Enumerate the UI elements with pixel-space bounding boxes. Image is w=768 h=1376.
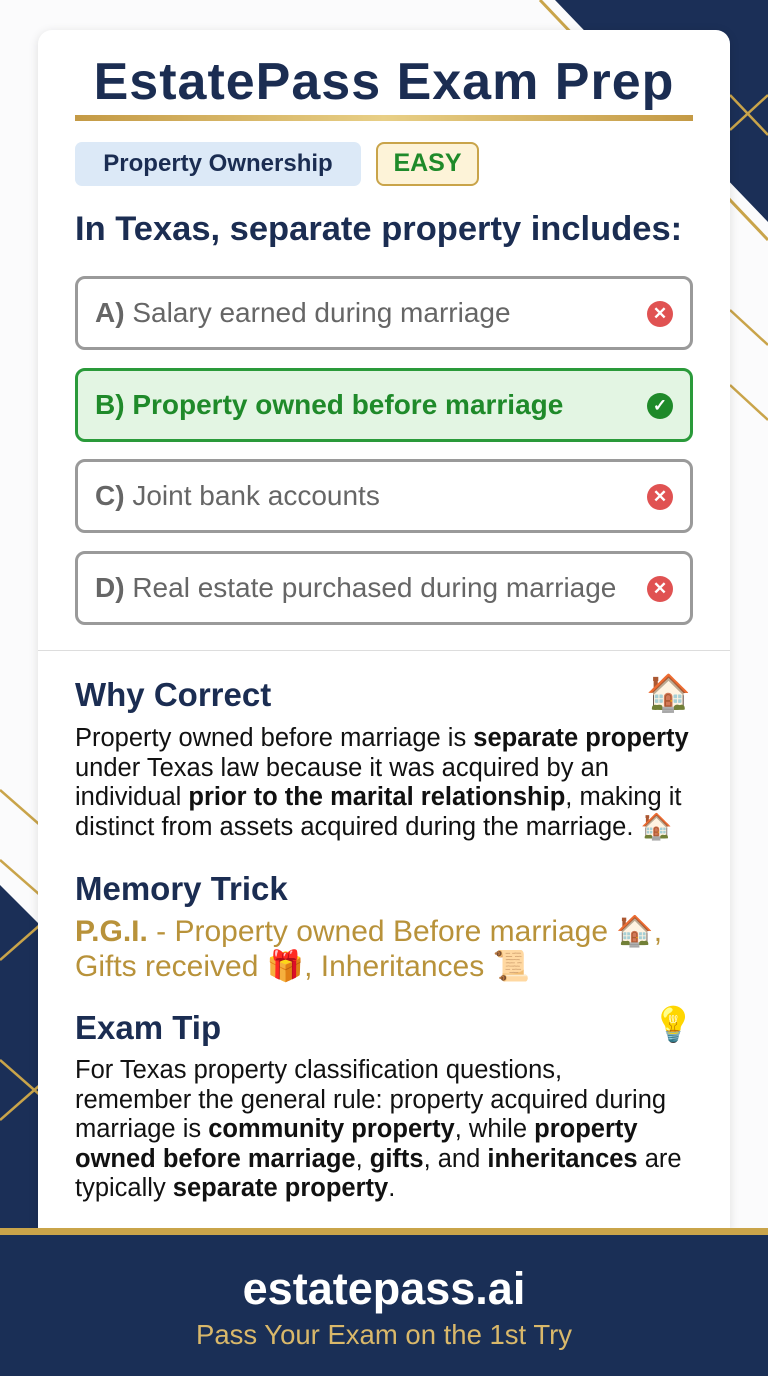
gold underline <box>75 115 693 121</box>
why correct text <box>75 724 689 840</box>
why correct text: under Texas law because it was acquired by an <box>75 754 609 782</box>
title: EstatePass Exam Prep <box>94 53 674 111</box>
tag: difficulty: EASY <box>393 149 462 177</box>
option A: A) Salary earned during marriage <box>95 297 511 328</box>
option C: C) Joint bank accounts <box>95 480 380 511</box>
option C: ✕ <box>653 487 667 506</box>
option B correct <box>75 368 693 442</box>
option B correct: ✓ <box>653 396 667 415</box>
footer tagline: Pass Your Exam on the 1st Try <box>196 1319 572 1350</box>
heading: why correct: Why Correct <box>75 676 271 713</box>
heading: memory trick: Memory Trick <box>75 870 288 907</box>
exam tip text: For Texas property classification questions, <box>75 1056 562 1084</box>
option A: ✕ <box>653 304 667 323</box>
exam tip text: typically separate property. <box>75 1174 395 1202</box>
exam tip text: remember the general rule: property acquired during <box>75 1086 666 1114</box>
option D <box>75 551 693 625</box>
option A <box>75 276 693 350</box>
option B correct: B) Property owned before marriage <box>95 389 563 420</box>
exam tip text: owned before marriage, gifts, and inheritances are <box>75 1144 682 1172</box>
option D: ✕ <box>653 579 667 598</box>
question: In Texas, separate property includes: <box>75 210 682 248</box>
memory trick text: Gifts received 🎁, Inheritances 📜 <box>75 950 530 983</box>
memory trick text: P.G.I. - Property owned Before marriage 🏠, <box>75 915 662 948</box>
exam tip text: marriage is community property, while property <box>75 1115 638 1143</box>
tag: topic <box>75 142 361 186</box>
footer <box>0 1228 768 1376</box>
why correct text: distinct from assets acquired during the marriage. 🏠 <box>75 812 672 840</box>
card <box>38 30 730 1230</box>
icon: lightbulb: 💡 <box>652 1006 694 1044</box>
why correct text: individual prior to the marital relationship, making it <box>75 783 682 811</box>
exam tip text <box>75 1056 682 1202</box>
option C <box>75 459 693 533</box>
option D: D) Real estate purchased during marriage <box>95 572 616 603</box>
icon: house: 🏠 <box>646 672 691 713</box>
tag: difficulty <box>376 142 479 186</box>
memory trick text <box>75 914 662 983</box>
footer brand: estatepass.ai <box>243 1263 525 1314</box>
heading: exam tip: Exam Tip <box>75 1009 221 1046</box>
why correct text: Property owned before marriage is separate property <box>75 724 689 752</box>
tag: topic: Property Ownership <box>103 150 333 177</box>
